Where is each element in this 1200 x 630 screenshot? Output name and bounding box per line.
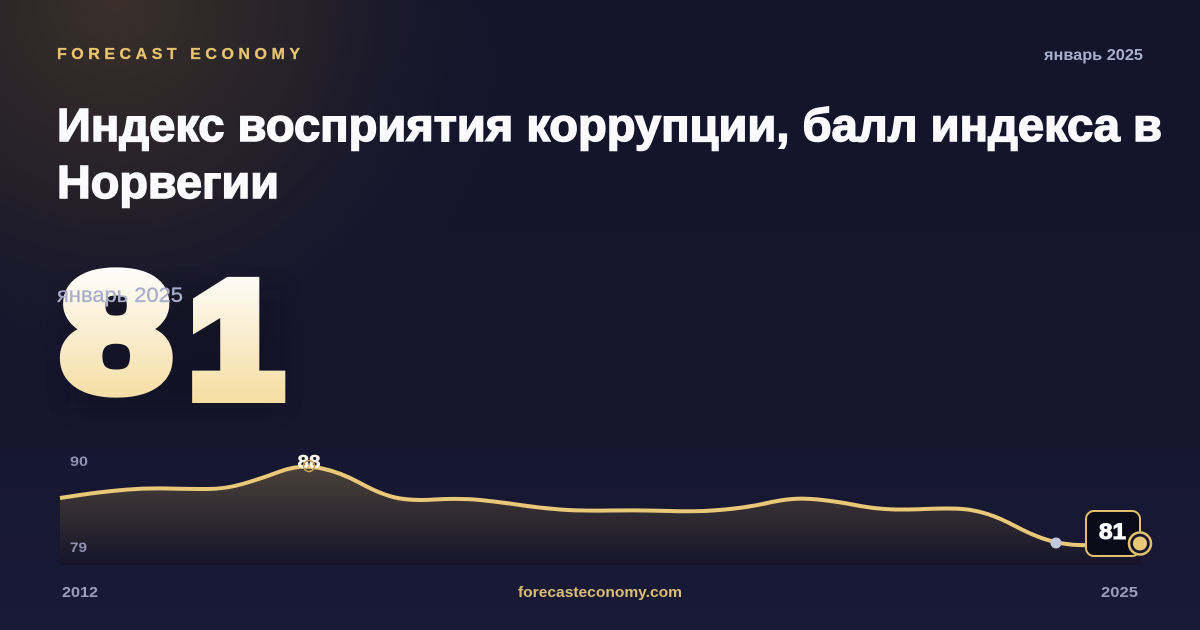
source url: forecasteconomy.com <box>518 584 682 601</box>
area fill <box>60 467 1141 565</box>
secondary point <box>1050 538 1062 548</box>
end year: 2025 <box>1101 584 1138 601</box>
peak label 88: 88 <box>298 452 320 472</box>
current point marker <box>1129 532 1151 554</box>
start year: 2012 <box>62 584 98 601</box>
brand label: FORECAST ECONOMY <box>57 46 300 63</box>
current value badge: 81 <box>1099 519 1126 544</box>
line series <box>60 467 1141 545</box>
title: Индекс восприятия коррупции, балл индекса в <box>57 99 1162 151</box>
current value badge <box>1086 511 1140 556</box>
big number 81: 1 <box>190 251 282 429</box>
title <box>57 99 1162 208</box>
big number 81: 8 <box>61 238 172 425</box>
big number 81 <box>61 238 282 429</box>
date overlay: январь 2025 <box>57 284 183 307</box>
date top right: январь 2025 <box>1044 47 1143 64</box>
title: Норвегии <box>57 156 279 208</box>
axis label 79: 79 <box>70 539 87 555</box>
axis label 90: 90 <box>70 453 88 469</box>
